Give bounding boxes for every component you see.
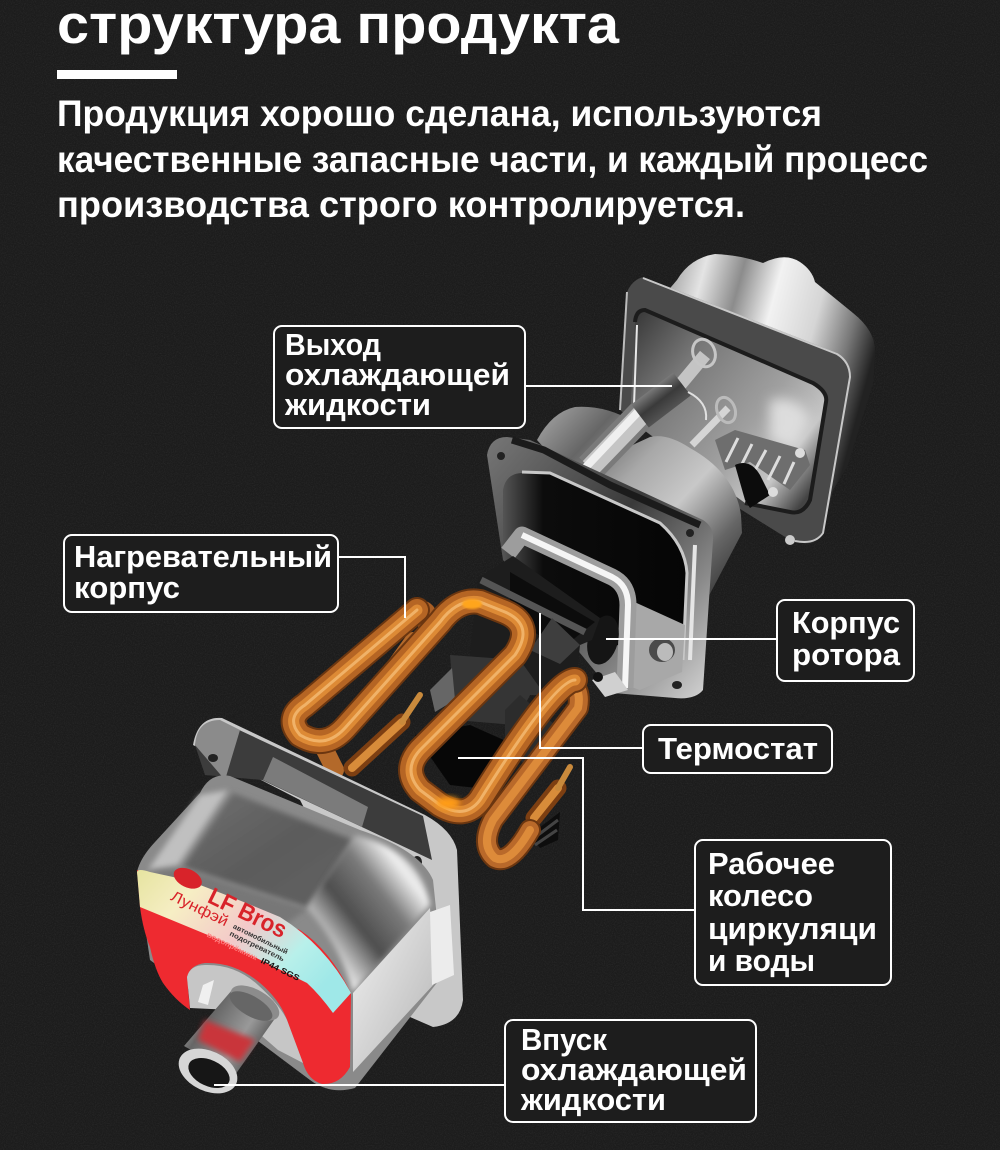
housing body: [137, 775, 443, 1090]
title underline: [57, 70, 177, 79]
callout: coolant outlet: жидкости: [284, 387, 431, 422]
rear housing: [620, 254, 875, 545]
subtitle text: [57, 93, 928, 225]
subtitle text: качественные запасные части, и каждый процесс: [57, 139, 928, 180]
rear arm: [395, 640, 413, 665]
brand text: подогреватель: [228, 931, 286, 964]
callout: coolant inlet: жидкости: [520, 1082, 666, 1117]
mounting flange: [487, 437, 713, 698]
callout: coolant outlet: охлаждающей: [285, 357, 510, 392]
impeller: [415, 725, 560, 848]
callout: coolant inlet: охлаждающей: [521, 1052, 747, 1087]
side clip: [430, 905, 454, 985]
brand text: IP44 SGS: [259, 956, 302, 983]
callout: circulation impeller: Рабочее: [708, 846, 835, 881]
cooling fins: [715, 430, 810, 490]
recess: [187, 965, 303, 1063]
subtitle text: производства строго контролируется.: [57, 184, 745, 225]
callout: heating body: корпус: [74, 570, 180, 605]
brand text: [154, 864, 322, 983]
callout: circulation impeller: и воды: [708, 943, 815, 978]
housing body: [537, 407, 742, 607]
inlet pipe: [184, 990, 276, 1075]
rotor cylinder: [582, 612, 624, 668]
callout: circulation impeller: циркуляци: [708, 911, 877, 946]
brand text: LF Bros: [204, 883, 291, 944]
callout: coolant outlet: Выход: [285, 327, 381, 362]
thermostat and dark internals: [430, 556, 600, 770]
callout: rotor housing: Корпус: [792, 605, 900, 640]
brand text: Лунфэй: [168, 888, 231, 930]
continuous tube: [487, 682, 579, 859]
silver inner base: [625, 600, 685, 690]
brand text: автомобильный: [232, 923, 289, 956]
inner pipe frame: [508, 535, 628, 688]
callout: coolant inlet: [214, 1020, 756, 1122]
heat shaft: [585, 384, 706, 468]
callout: rotor housing: ротора: [792, 637, 901, 672]
exploded product illustration: [137, 254, 875, 1102]
right face: [353, 908, 435, 1072]
callout: heating body: Нагревательный: [74, 539, 332, 574]
callout: heating body: [64, 535, 405, 618]
callout: coolant outlet: [274, 326, 672, 428]
brand text: водопрёмник: [205, 932, 258, 962]
top face: [183, 793, 353, 907]
opening: [503, 473, 687, 672]
callout: thermostat: [540, 613, 832, 773]
callout: circulation impeller: [458, 758, 891, 985]
iridescent band: [137, 870, 351, 1013]
mounting flange: [193, 718, 463, 1027]
callout: coolant inlet: Впуск: [521, 1022, 607, 1057]
subtitle text: Продукция хорошо сделана, используются: [57, 93, 822, 134]
copper heating element: [294, 599, 579, 859]
front housing: [137, 718, 463, 1102]
callout: circulation impeller: колесо: [708, 878, 813, 913]
clip: [263, 757, 368, 827]
small rods: [692, 408, 728, 445]
printed red label: [137, 870, 351, 1084]
rotor housing: [487, 384, 742, 698]
callout: rotor housing: [606, 600, 914, 681]
lit side band: [307, 835, 430, 992]
callout: thermostat: Термостат: [658, 731, 818, 766]
